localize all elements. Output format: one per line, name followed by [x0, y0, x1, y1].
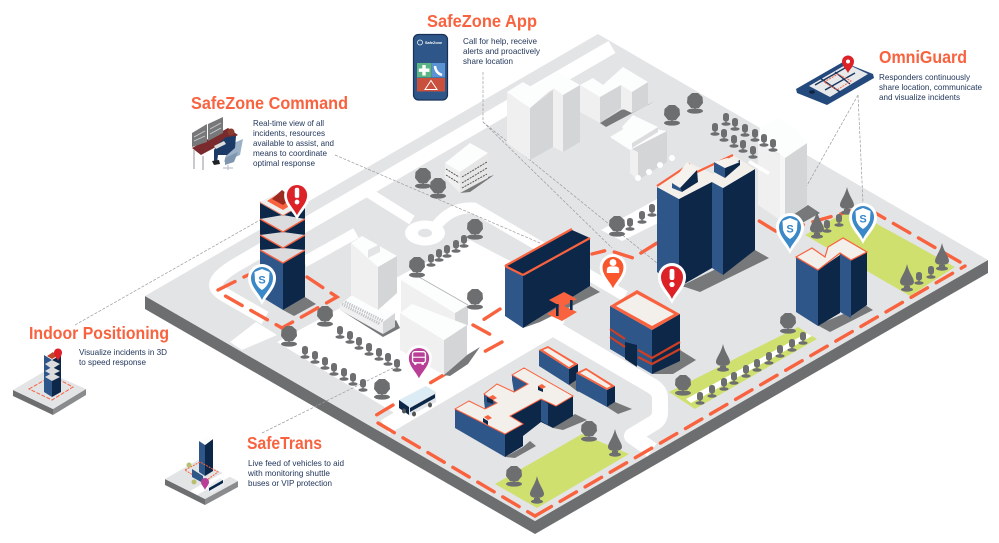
- text: SafeZone Command description: optimal response: [253, 158, 315, 168]
- text: SafeZone App description: alerts and proactively: [463, 46, 541, 56]
- text: SafeZone App description: share location: [463, 56, 513, 66]
- icon: command desk operator: [192, 117, 243, 170]
- text: SafeTrans description: [247, 458, 344, 488]
- tall white building with grate: [340, 236, 400, 337]
- small blue block 2: [576, 368, 632, 414]
- pin: blue shield right: [849, 203, 877, 244]
- icon: mini SafeTrans: [165, 436, 238, 505]
- white building cluster: top middle: [580, 67, 655, 127]
- text: SafeZone Command description: means to coordinate: [253, 148, 327, 158]
- pin: red alert: [658, 263, 686, 304]
- hospital building: [455, 368, 587, 458]
- pin: blue shield left: [776, 213, 804, 254]
- text: Indoor Positioning description: to speed response: [79, 357, 146, 367]
- text: SafeZone Command description: [253, 118, 334, 168]
- text: Indoor Positioning description: [79, 347, 167, 367]
- dark twin tower: [657, 155, 769, 292]
- white strip inside lawn: [686, 333, 812, 403]
- orange trim building: [610, 290, 696, 374]
- title: SafeZone App: SafeZone App: [427, 11, 537, 31]
- text: SafeZone App description: [463, 36, 541, 66]
- shuttle bus: [399, 386, 436, 416]
- red perimeter dashed route: [218, 207, 965, 516]
- text: OmniGuard description: share location, communicate: [879, 82, 982, 92]
- pin: red alert on tower: [284, 182, 310, 220]
- text: Indoor Positioning description: Visualize incidents in 3D: [79, 347, 167, 357]
- pin: blue shield left: S: [786, 224, 794, 236]
- dark building: centre with canopy: [505, 229, 600, 328]
- text: SafeTrans description: buses or VIP protection: [248, 478, 332, 488]
- text: SafeZone Command description: Real-time view of all: [253, 118, 324, 128]
- text: SafeZone App description: Call for help, receive: [463, 36, 537, 46]
- white building cluster: top left: [507, 72, 580, 160]
- lawn: right park: [805, 209, 955, 296]
- pin: orange person: [600, 254, 626, 293]
- title: Indoor Positioning: Indoor Positioning: [29, 323, 169, 343]
- text: SafeZone Command description: available to assist, and: [253, 138, 334, 148]
- text: OmniGuard description: and visualize incidents: [879, 92, 960, 102]
- text: SafeTrans description: Live feed of vehicles to aid: [248, 458, 344, 468]
- text: SafeTrans description: with monitoring shuttle: [247, 468, 330, 478]
- pin: magenta bus: [406, 345, 432, 383]
- title: SafeTrans: SafeTrans: [247, 433, 322, 453]
- leader lines: [75, 72, 863, 433]
- icon: SafeZone App phone: SafeZone: [425, 41, 442, 45]
- icon: OmniGuard phone: [796, 56, 874, 105]
- white building: low block: [610, 115, 675, 181]
- icon: SafeZone App phone: [414, 34, 448, 100]
- trees: [281, 93, 949, 504]
- lawn: tree strip: [669, 327, 817, 409]
- white building: top right tower: [748, 118, 820, 227]
- pin: blue shield on tower: S: [258, 274, 266, 286]
- panel: campus platform: [145, 34, 988, 534]
- lawn: bottom park: [495, 434, 629, 508]
- icon: mini indoor positioning: [13, 348, 86, 415]
- pin: blue shield on tower: [248, 264, 276, 305]
- text: OmniGuard description: [879, 72, 982, 102]
- roads: [216, 47, 680, 450]
- large white building: [400, 273, 480, 376]
- text: SafeZone Command description: incidents, resources: [253, 128, 325, 138]
- small blue block 1: [539, 346, 590, 392]
- text: OmniGuard description: Responders continuously: [879, 72, 971, 82]
- title: SafeZone Command: SafeZone Command: [191, 93, 348, 113]
- title: OmniGuard: OmniGuard: [879, 47, 967, 67]
- pin: blue shield right: S: [859, 214, 867, 226]
- dark building: right with park: [796, 238, 873, 332]
- small white striped building: [445, 143, 494, 193]
- indoor positioning tower: [260, 190, 316, 316]
